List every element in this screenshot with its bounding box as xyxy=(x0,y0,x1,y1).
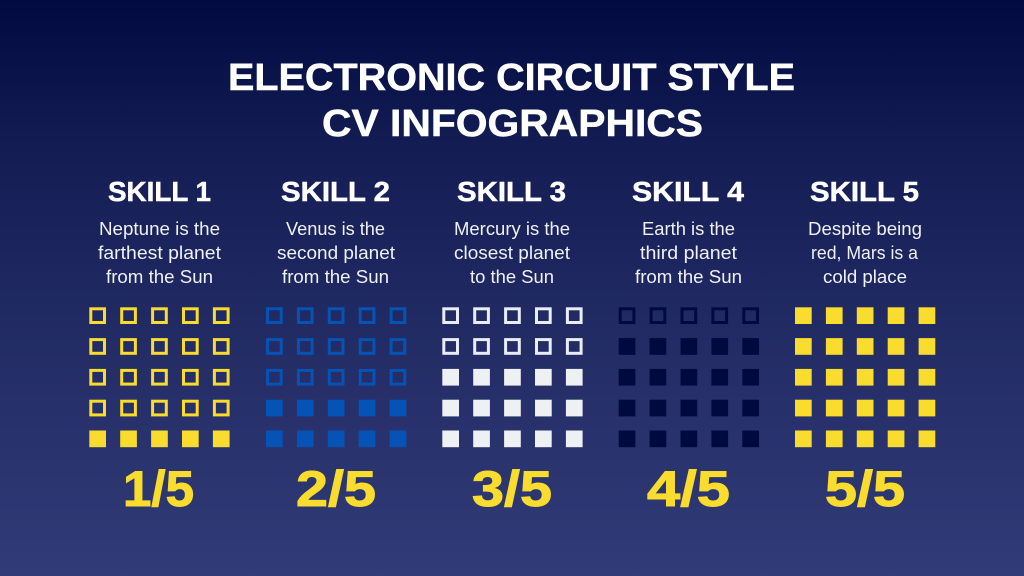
text: skill 5 description: red, Mars is a xyxy=(811,243,919,263)
text: skill 4 description: Earth is the xyxy=(642,219,735,239)
title xyxy=(228,57,795,145)
grid: skill 1, one filled row xyxy=(89,309,230,447)
panel: skill 1 xyxy=(89,176,230,517)
text: skill 3 description: Mercury is the xyxy=(454,219,570,239)
text: skill 3 description: closest planet xyxy=(454,243,570,263)
title: ELECTRONIC CIRCUIT STYLE xyxy=(228,57,795,99)
grid: skill 3, three filled rows xyxy=(442,309,583,447)
panel: skill 2 xyxy=(266,176,406,517)
panel: skill 5 xyxy=(795,176,935,517)
score: 1/5: 1/5 xyxy=(123,461,194,517)
text: skill 3 description xyxy=(454,219,570,287)
grid: skill 2, two filled rows xyxy=(266,309,406,447)
text: skill 5 description: Despite being xyxy=(808,219,922,239)
text: skill 4 description: third planet xyxy=(640,243,737,263)
heading: skill 2: SKILL 2 xyxy=(281,176,390,207)
heading: skill 5: SKILL 5 xyxy=(810,176,919,207)
panel: skill 4 xyxy=(619,176,759,517)
heading: skill 4: SKILL 4 xyxy=(632,176,744,207)
heading: skill 1: SKILL 1 xyxy=(108,176,211,207)
grid: skill 5, all rows filled xyxy=(795,307,935,447)
text: skill 2 description: Venus is the xyxy=(286,219,385,239)
text: skill 4 description xyxy=(635,219,742,287)
heading: skill 3: SKILL 3 xyxy=(457,176,566,207)
text: skill 1 description: from the Sun xyxy=(106,267,213,287)
text: skill 5 description: cold place xyxy=(823,267,907,287)
text: skill 1 description: farthest planet xyxy=(98,243,221,263)
panel: skill 3 xyxy=(442,176,583,517)
text: skill 4 description: from the Sun xyxy=(635,267,742,287)
text: skill 1 description xyxy=(98,219,221,287)
grid: skill 4, four filled rows xyxy=(619,309,759,447)
score: 3/5: 3/5 xyxy=(472,461,552,517)
text: skill 2 description xyxy=(277,219,395,287)
score: 5/5: 5/5 xyxy=(825,461,905,517)
text: skill 5 description xyxy=(808,219,922,287)
text: skill 3 description: to the Sun xyxy=(470,267,554,287)
title: CV INFOGRAPHICS xyxy=(322,103,703,145)
text: skill 2 description: from the Sun xyxy=(282,267,389,287)
text: skill 1 description: Neptune is the xyxy=(99,219,220,239)
score: 2/5: 2/5 xyxy=(296,461,376,517)
score: 4/5: 4/5 xyxy=(647,461,730,517)
text: skill 2 description: second planet xyxy=(277,243,395,263)
